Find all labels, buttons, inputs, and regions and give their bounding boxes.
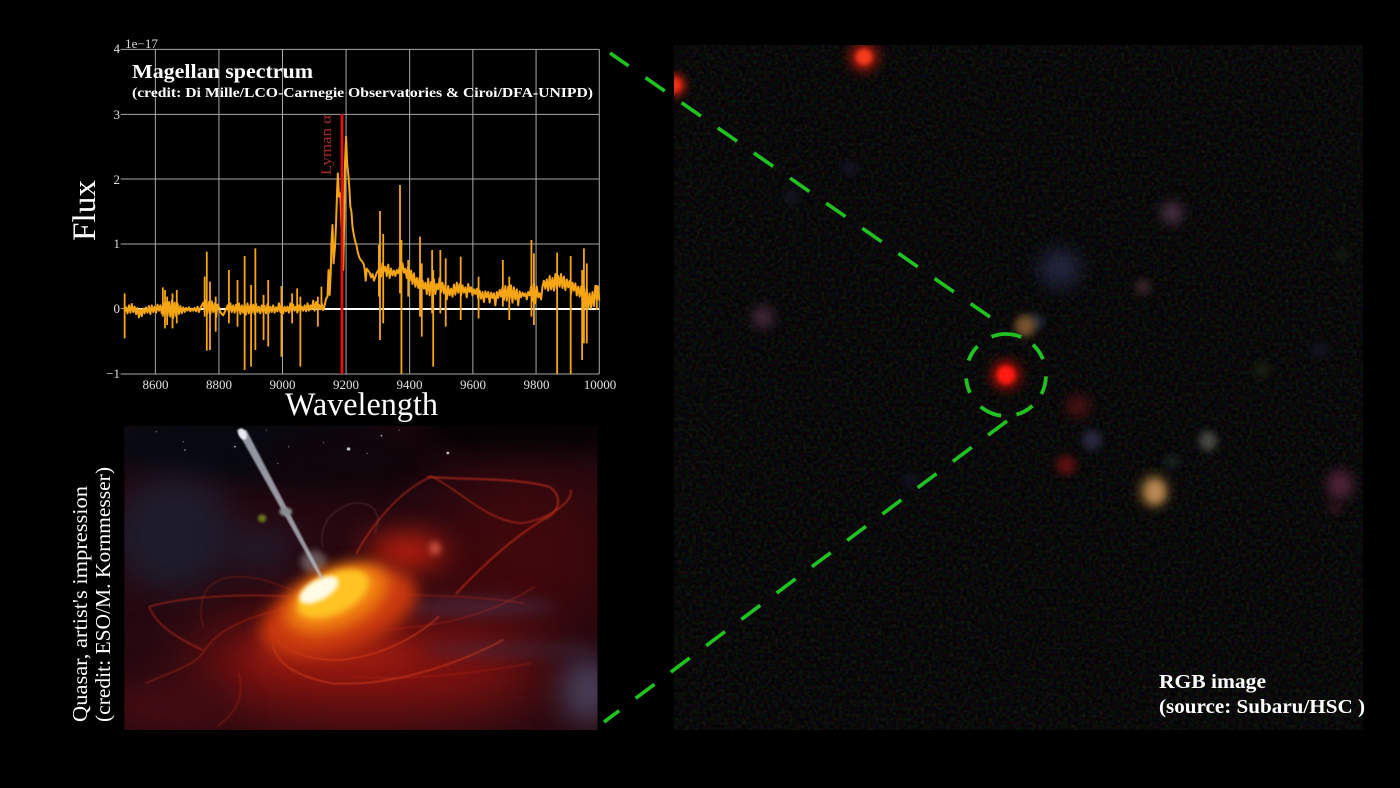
x axis tick labels: 10000 [584, 377, 616, 392]
x axis tick labels: 9200 [333, 377, 359, 392]
RGB image caption: RGB image [1159, 671, 1266, 693]
scale exponent: 1e−17 [125, 37, 158, 51]
dashed connector: lower [604, 421, 1007, 722]
x axis tick labels: 9400 [396, 377, 422, 392]
zero line [124, 308, 599, 310]
spectrum trace [125, 137, 599, 374]
grey cloud at jet base [301, 550, 326, 573]
panel: quasar artist's impression [124, 426, 598, 730]
yellow-orange galaxy [1140, 475, 1168, 507]
faint field galaxies [752, 160, 1353, 514]
Lyman alpha label: Lyman α [319, 115, 335, 175]
chart credit: (credit: Di Mille/LCO-Carnegie Observatories & Ciroi/DFA-UNIPD) [132, 86, 593, 101]
RGB image caption: (source: Subaru/HSC ) [1159, 696, 1365, 718]
stars [156, 429, 449, 464]
chart title: Magellan spectrum [132, 61, 313, 83]
y axis title: Flux [67, 180, 103, 241]
x axis tick labels [142, 377, 616, 392]
x axis title: Wavelength [285, 387, 438, 423]
jet [236, 427, 324, 579]
RGB image caption [1159, 671, 1365, 718]
grid lines [121, 49, 599, 374]
quasar caption [68, 467, 115, 722]
x axis tick labels: 9000 [270, 377, 296, 392]
red source at left edge [662, 73, 686, 97]
panel: spectrum chart [67, 37, 616, 423]
y axis tick labels: 4 [114, 41, 120, 56]
x axis tick labels: 9800 [524, 377, 550, 392]
quasar caption: (credit: ESO/M. Kornmesser) [91, 467, 115, 722]
red gas filaments [146, 477, 571, 727]
x axis tick labels: 9600 [460, 377, 486, 392]
y axis tick labels: 3 [114, 107, 120, 122]
panel: RGB sky image [662, 43, 1363, 730]
highlight circle around quasar [966, 334, 1046, 416]
distant galaxy [258, 514, 266, 522]
x axis tick labels: 8800 [206, 377, 232, 392]
orange neighbour galaxy [1015, 314, 1043, 337]
y axis tick labels [106, 41, 120, 381]
nebula background [124, 426, 598, 730]
accretion disk glow [250, 552, 428, 664]
y axis tick labels: 1 [114, 236, 120, 251]
x axis tick labels: 8600 [142, 377, 168, 392]
y axis tick labels: −1 [106, 366, 120, 381]
y axis tick labels: 0 [114, 301, 120, 316]
quasar caption: Quasar, artist's impression [68, 485, 92, 722]
quasar source [992, 361, 1020, 389]
Lyman alpha marker line [341, 114, 343, 374]
y axis tick labels: 2 [114, 172, 120, 187]
dashed connector: upper [610, 53, 990, 317]
red source top [850, 43, 878, 71]
